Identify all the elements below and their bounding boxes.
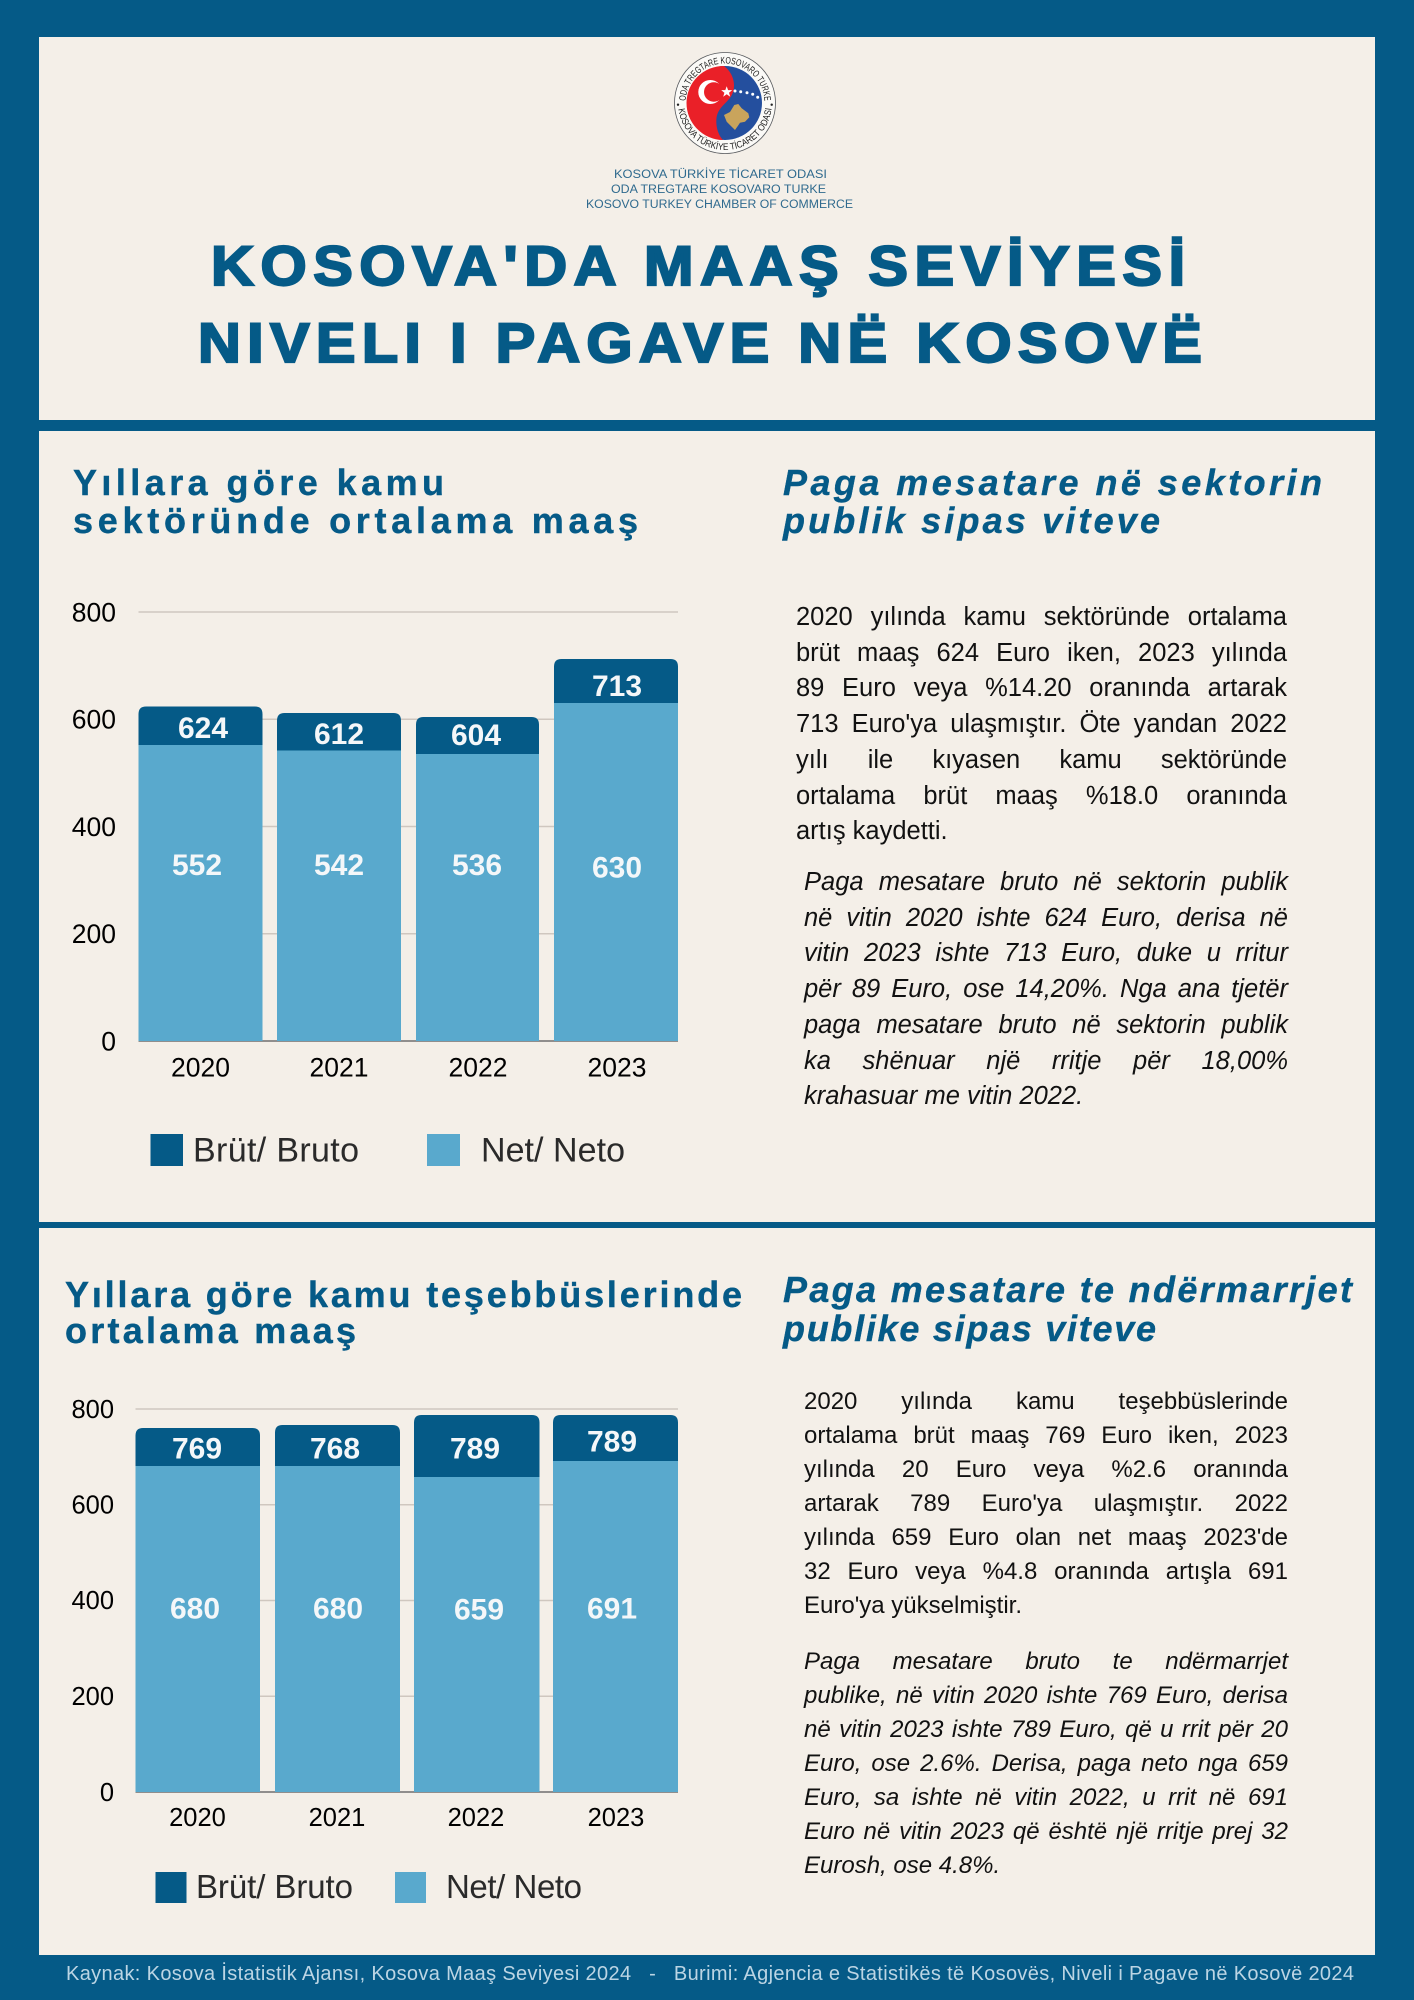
net values bbox=[170, 1592, 637, 1626]
text: Albanian paragraph: Euro në vitin 2023 që është një rritje prej 32 bbox=[804, 1818, 1288, 1845]
legend: Net/ Neto bbox=[446, 1868, 582, 1905]
x axis labels: 2022 bbox=[448, 1804, 504, 1832]
text: Turkish paragraph: Euro'ya yükselmiştir. bbox=[804, 1592, 1022, 1619]
net values: 630 bbox=[592, 852, 642, 884]
y axis labels: 600 bbox=[72, 704, 116, 734]
source footer: Kaynak: Kosova İstatistik Ajansı, Kosova Maaş Seviyesi 2024 - Burimi: Agjencia e Statistikës të Kosovës, Niveli i Pagave në Kosovë 2024 bbox=[66, 1962, 1354, 1985]
heading: Turkish bbox=[73, 462, 638, 541]
title bbox=[198, 236, 1202, 375]
text: Albanian paragraph: për 89 Euro, ose 14,20%. Nga ana tjetër bbox=[804, 975, 1288, 1003]
text: Albanian paragraph: në vitin 2020 ishte 624 Euro, derisa në bbox=[804, 904, 1288, 932]
heading: Turkish: Yıllara göre kamu teşebbüslerinde bbox=[65, 1274, 742, 1315]
text: Turkish paragraph bbox=[804, 1388, 1288, 1619]
heading: Albanian: publike sipas viteve bbox=[782, 1308, 1156, 1349]
net values: 552 bbox=[172, 849, 222, 882]
heading: Albanian bbox=[782, 462, 1322, 541]
text: Turkish paragraph: 2020 yılında kamu sektöründe ortalama bbox=[796, 603, 1287, 631]
text: Albanian paragraph: publike, në vitin 2020 ishte 769 Euro, derisa bbox=[804, 1682, 1288, 1709]
gross values bbox=[178, 670, 642, 752]
y axis labels: 200 bbox=[72, 919, 116, 949]
text: Albanian paragraph: paga mesatare bruto në sektorin publik bbox=[804, 1011, 1288, 1039]
heading: Albanian: publik sipas viteve bbox=[782, 500, 1160, 541]
text: Turkish paragraph: artarak 789 Euro'ya ulaşmıştır. 2022 bbox=[804, 1490, 1288, 1517]
text: Turkish paragraph: yılında 659 Euro olan net maaş 2023'de bbox=[804, 1524, 1288, 1551]
organisation name: KOSOVO TURKEY CHAMBER OF COMMERCE bbox=[586, 199, 853, 211]
icon: chamber of commerce logo: ODA TREGTARE KOSOVARO TURKE bbox=[679, 56, 771, 101]
text: Turkish paragraph: ortalama brüt maaş 769 Euro iken, 2023 bbox=[804, 1422, 1288, 1449]
gross values: 769 bbox=[172, 1432, 222, 1466]
x axis labels bbox=[169, 1804, 644, 1832]
gross values: 713 bbox=[592, 670, 642, 703]
text: Turkish paragraph: yılında 20 Euro veya %2.6 oranında bbox=[804, 1456, 1288, 1483]
text: Albanian paragraph: Paga mesatare bruto në sektorin publik bbox=[804, 868, 1288, 896]
y axis labels: 0 bbox=[100, 1779, 114, 1807]
x axis labels: 2022 bbox=[449, 1052, 507, 1082]
text: Turkish paragraph: 89 Euro veya %14.20 oranında artarak bbox=[796, 674, 1287, 702]
net values: 680 bbox=[313, 1592, 363, 1626]
heading: Turkish: sektöründe ortalama maaş bbox=[73, 500, 638, 541]
heading: Albanian: Paga mesatare te ndërmarrjet bbox=[783, 1269, 1354, 1310]
bars: net bbox=[138, 703, 678, 1041]
x axis labels: 2020 bbox=[171, 1052, 230, 1082]
text: Turkish paragraph: 2020 yılında kamu teşebbüslerinde bbox=[804, 1388, 1288, 1415]
text: Turkish paragraph: yılı ile kıyasen kamu sektöründe bbox=[796, 746, 1287, 774]
gross values: 624 bbox=[178, 712, 228, 745]
heading: Turkish: ortalama maaş bbox=[65, 1310, 356, 1351]
text: Albanian paragraph: Euro, sa ishte në vitin 2022, u rrit në 691 bbox=[804, 1784, 1288, 1811]
legend bbox=[150, 1132, 625, 1170]
panel: public sector salaries bbox=[39, 431, 1375, 1222]
text: Turkish paragraph: ortalama brüt maaş %18.0 oranında bbox=[796, 782, 1287, 810]
net values: 680 bbox=[170, 1592, 220, 1626]
x axis labels bbox=[171, 1052, 646, 1082]
x axis labels: 2023 bbox=[588, 1804, 644, 1832]
title: NIVELI I PAGAVE NË KOSOVË bbox=[198, 313, 1202, 375]
heading: Turkish bbox=[65, 1274, 742, 1351]
y axis labels: 400 bbox=[71, 1587, 114, 1615]
icon: chamber of commerce logo: KOSOVA TÜRKİYE TİCARET ODASI bbox=[678, 108, 772, 150]
bar chart: public sector bbox=[72, 598, 678, 1082]
y axis labels: 800 bbox=[72, 598, 116, 628]
net values bbox=[172, 849, 642, 884]
net values: 691 bbox=[587, 1592, 637, 1626]
text: Albanian paragraph bbox=[803, 868, 1289, 1110]
text: Turkish paragraph bbox=[796, 603, 1288, 845]
gross values: 612 bbox=[314, 718, 364, 751]
net values: 659 bbox=[454, 1594, 504, 1626]
bar chart: public enterprises bbox=[71, 1396, 678, 1832]
x axis labels: 2021 bbox=[309, 1804, 365, 1832]
organisation name: ODA TREGTARE KOSOVARO TURKE bbox=[611, 184, 826, 196]
legend: Brüt/ Bruto bbox=[193, 1132, 359, 1170]
text: Albanian paragraph: Eurosh, ose 4.8%. bbox=[804, 1852, 1000, 1879]
net values: 542 bbox=[314, 849, 364, 882]
bars: net bbox=[136, 1461, 678, 1792]
text: Albanian paragraph: vitin 2023 ishte 713 Euro, duke u rritur bbox=[804, 939, 1288, 967]
text: Albanian paragraph: Paga mesatare bruto te ndërmarrjet bbox=[804, 1648, 1288, 1675]
text: Turkish paragraph: artış kaydetti. bbox=[796, 817, 948, 845]
gross values bbox=[172, 1426, 637, 1466]
y axis labels bbox=[71, 1396, 114, 1807]
gross values: 789 bbox=[450, 1432, 500, 1466]
legend: Net/ Neto bbox=[481, 1132, 625, 1170]
title: KOSOVA'DA MAAŞ SEVİYESİ bbox=[211, 236, 1185, 298]
heading: Albanian bbox=[782, 1269, 1354, 1349]
y axis labels bbox=[72, 598, 116, 1056]
organisation name bbox=[586, 168, 853, 211]
x axis labels: 2023 bbox=[588, 1052, 646, 1082]
panel: header bbox=[39, 37, 1375, 420]
text: Turkish paragraph: 32 Euro veya %4.8 oranında artışla 691 bbox=[804, 1558, 1288, 1585]
panel: public enterprise salaries bbox=[39, 1228, 1375, 1955]
bars: gross bbox=[138, 659, 678, 754]
bars: gross bbox=[136, 1415, 678, 1477]
legend: Brüt/ Bruto bbox=[196, 1868, 353, 1905]
text: Albanian paragraph: krahasuar me vitin 2022. bbox=[804, 1082, 1083, 1110]
heading: Albanian: Paga mesatare në sektorin bbox=[783, 462, 1322, 503]
x axis labels: 2020 bbox=[169, 1804, 226, 1832]
y axis labels: 0 bbox=[101, 1026, 116, 1056]
heading: Turkish: Yıllara göre kamu bbox=[73, 462, 444, 503]
text: Turkish paragraph: 713 Euro'ya ulaşmıştır. Öte yandan 2022 bbox=[796, 710, 1287, 738]
y axis labels: 800 bbox=[71, 1396, 114, 1424]
x axis labels: 2021 bbox=[310, 1052, 368, 1082]
gross values: 768 bbox=[310, 1432, 360, 1466]
icon: chamber of commerce logo bbox=[674, 52, 776, 154]
net values: 536 bbox=[452, 849, 502, 882]
y axis labels: 600 bbox=[71, 1492, 114, 1520]
text: Albanian paragraph: në vitin 2023 ishte 789 Euro, që u rrit për 20 bbox=[804, 1716, 1288, 1743]
y axis labels: 400 bbox=[72, 812, 116, 842]
gross values: 789 bbox=[587, 1426, 637, 1458]
text: Turkish paragraph: brüt maaş 624 Euro iken, 2023 yılında bbox=[796, 639, 1287, 667]
organisation name: KOSOVA TÜRKİYE TİCARET ODASI bbox=[614, 168, 827, 181]
text: Albanian paragraph bbox=[803, 1648, 1289, 1879]
gross values: 604 bbox=[451, 719, 501, 752]
legend bbox=[156, 1868, 582, 1905]
text: Albanian paragraph: ka shënuar një rritje për 18,00% bbox=[804, 1047, 1288, 1075]
y axis labels: 200 bbox=[71, 1683, 114, 1711]
text: Albanian paragraph: Euro, ose 2.6%. Derisa, paga neto nga 659 bbox=[804, 1750, 1288, 1777]
